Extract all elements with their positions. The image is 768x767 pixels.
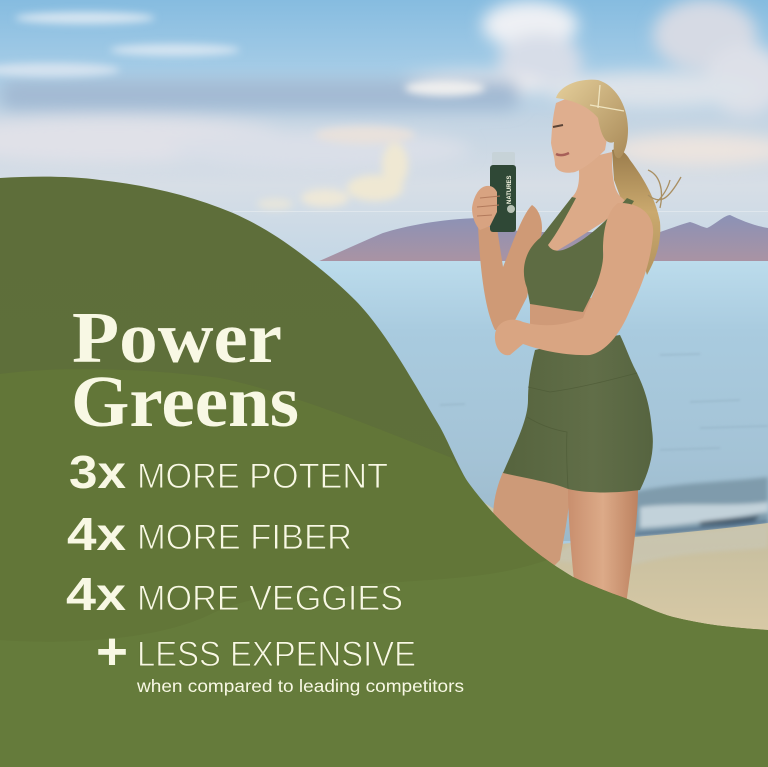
benefit: less expensive bbox=[96, 623, 416, 681]
wave shading: middle layer bbox=[0, 369, 547, 660]
sea bbox=[0, 261, 768, 541]
face bbox=[551, 95, 612, 173]
title: Power bbox=[72, 297, 282, 378]
ponytail bbox=[612, 149, 660, 275]
benefit: fiber: MORE FIBER bbox=[137, 518, 352, 557]
wet sand bbox=[547, 525, 768, 565]
top side sliver bbox=[615, 300, 633, 320]
wave shading: lower layer bbox=[0, 560, 768, 767]
sand bbox=[480, 500, 768, 640]
benefit: veggies bbox=[66, 568, 403, 620]
neck bbox=[540, 152, 630, 252]
clouds bbox=[0, 0, 768, 210]
woman bbox=[472, 80, 681, 610]
bottle: NATURES bbox=[507, 175, 513, 204]
shorts seams bbox=[527, 373, 637, 488]
benefit: veggies: 4x bbox=[66, 568, 126, 620]
benefit: fiber bbox=[67, 508, 352, 560]
bottle bbox=[490, 152, 516, 232]
flyaway hair bbox=[648, 170, 681, 208]
shorts bbox=[503, 335, 653, 492]
benefit: veggies: MORE VEGGIES bbox=[137, 579, 403, 618]
left arm bbox=[478, 205, 542, 330]
mountains bbox=[317, 215, 768, 262]
hand bbox=[472, 186, 497, 230]
fingers bbox=[477, 196, 500, 216]
legs bbox=[493, 472, 570, 590]
title bbox=[71, 297, 299, 442]
benefit: less expensive: LESS EXPENSIVE bbox=[137, 635, 416, 674]
torso skin bbox=[530, 295, 632, 345]
right arm bbox=[495, 203, 653, 355]
footnote: when compared to leading competitors bbox=[136, 676, 464, 696]
sky bbox=[0, 0, 768, 265]
hair band bbox=[590, 85, 624, 111]
horizon line bbox=[233, 211, 768, 212]
hair bbox=[556, 80, 628, 158]
title: Greens bbox=[71, 361, 299, 442]
sea ripples bbox=[440, 354, 768, 450]
benefit: potent bbox=[69, 446, 388, 498]
benefit: potent: MORE POTENT bbox=[137, 457, 388, 496]
benefit: potent: 3x bbox=[69, 446, 126, 498]
shore wave bbox=[633, 477, 768, 537]
benefit: less expensive: + bbox=[96, 623, 128, 681]
eye and lips bbox=[553, 125, 569, 155]
benefit: fiber: 4x bbox=[67, 508, 126, 560]
green wave bbox=[0, 177, 768, 767]
sports top bbox=[524, 197, 634, 312]
